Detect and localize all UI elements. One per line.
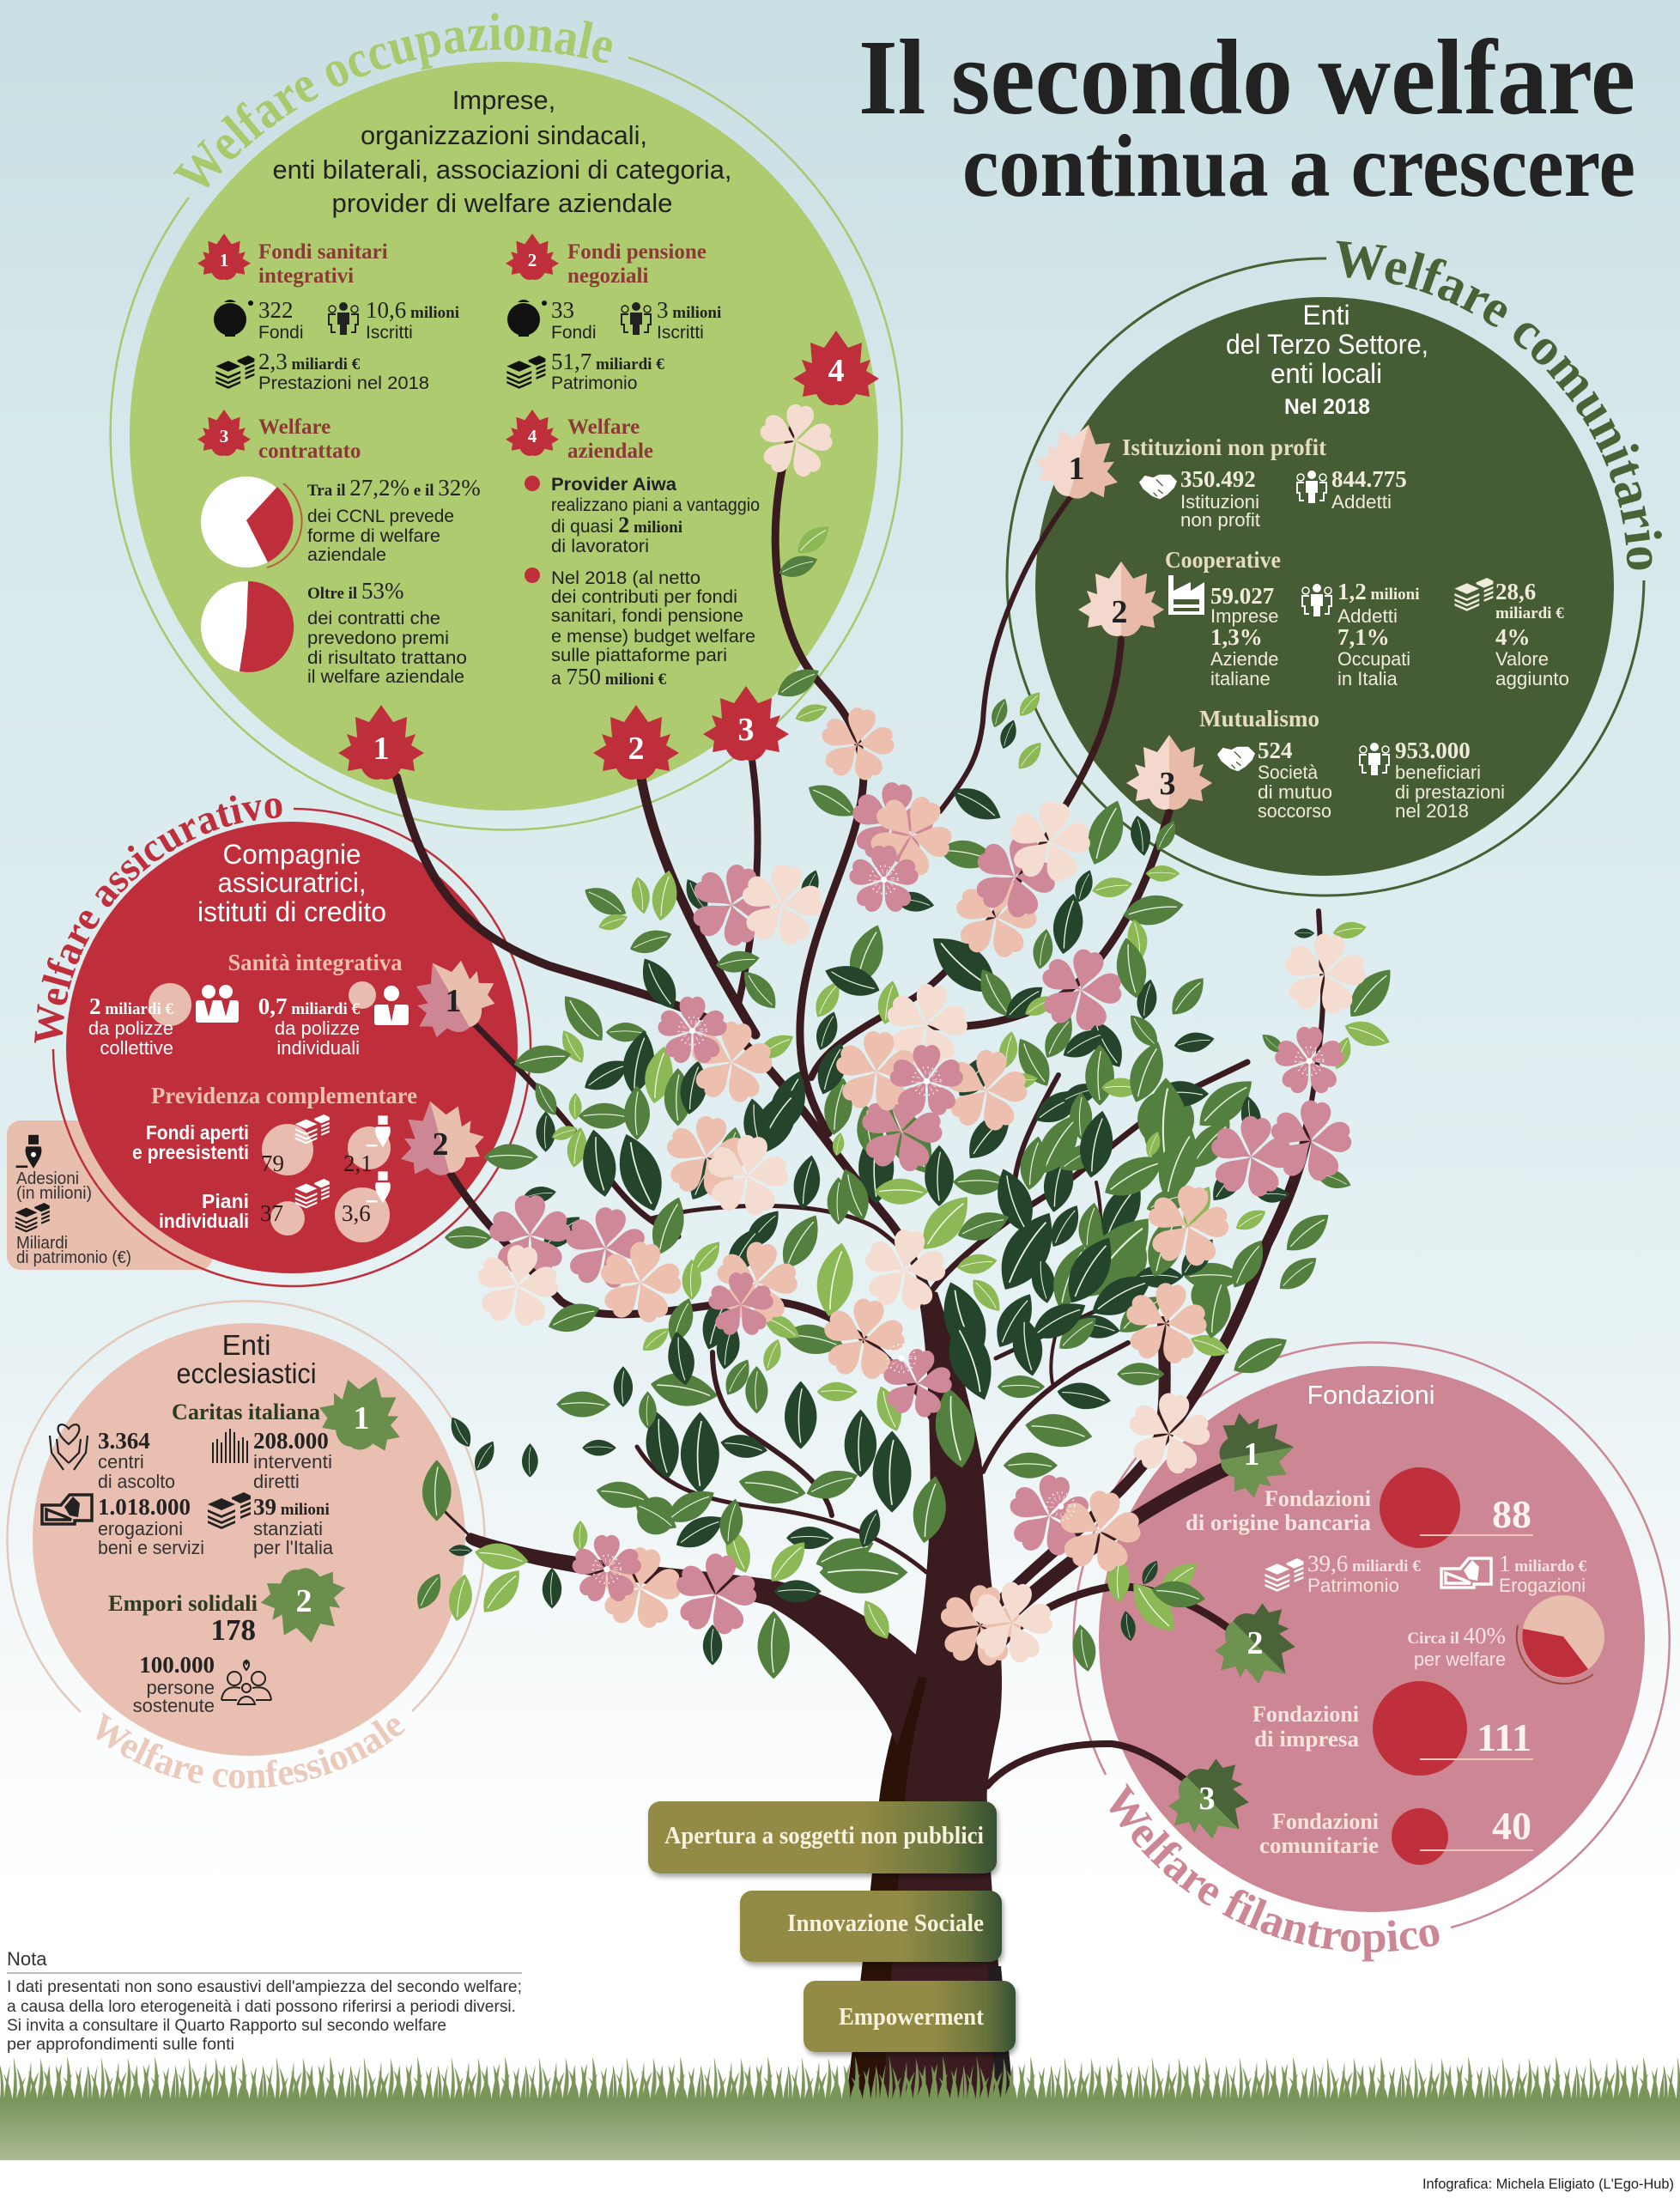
section: istituzioni non profit: Istituzioni: [1180, 491, 1259, 513]
left limb: [465, 1533, 923, 1747]
section: caritas italiana: di ascolto: [98, 1471, 175, 1492]
section: fondi pensione negoziali: Patrimonio: [551, 373, 637, 393]
nota text block: Nota: [7, 1948, 47, 1970]
item: fondazioni comunitarie 40: comunitarie: [1259, 1833, 1379, 1858]
section: cooperative: Aziende: [1210, 648, 1279, 670]
legend box: adesioni and patrimonio: (in milioni): [16, 1184, 92, 1203]
item: fondazioni di origine bancaria 88: 88: [1492, 1492, 1531, 1536]
section: caritas italiana: 1.018.000: [98, 1494, 191, 1520]
legend box: adesioni and patrimonio: Adesioni: [16, 1169, 79, 1188]
section: welfare contrattato with pies: contrattato: [258, 440, 361, 463]
section: welfare aziendale: e mense) budget welfare: [551, 627, 755, 647]
section: welfare aziendale: [506, 410, 760, 689]
intro text: enti locali: [1271, 358, 1382, 389]
section: istituzioni non profit: non profit: [1180, 509, 1260, 531]
nota text block: per approfondimenti sulle fonti: [7, 2036, 234, 2054]
branch to comunitario leaf 1: [940, 494, 1073, 811]
bubbles: values: [262, 1124, 391, 1242]
intro text: ecclesiastici: [177, 1357, 316, 1389]
section: welfare aziendale: sulle piattaforme pari: [551, 646, 727, 665]
section: welfare contrattato with pies: il welfare aziendale: [307, 667, 464, 687]
numbered leaves: assicurativo: 2: [433, 1126, 448, 1163]
section: welfare aziendale: realizzano piani a vantaggio: [551, 495, 760, 515]
section: mutualismo: di mutuo: [1258, 781, 1332, 803]
numbered leaves: filantropico: [1156, 1405, 1316, 1860]
section: fondi sanitari integrativi: 10,6 milioni: [366, 297, 459, 323]
label: apertura a soggetti non pubblici: [648, 1801, 997, 1873]
section: welfare aziendale: Nel 2018 (al netto: [551, 568, 701, 588]
numbered leaves: confessionale: 1: [354, 1400, 369, 1436]
arc heading: welfare comunitario: Welfare comunitario: [1336, 240, 1662, 570]
intro text: Enti: [222, 1329, 270, 1361]
section: welfare aziendale: aziendale: [567, 440, 653, 463]
section: fondi pensione negoziali: 51,7 miliardi €: [551, 349, 664, 374]
numbered leaves: confessionale: 2: [295, 1583, 312, 1619]
intro text: [177, 1329, 316, 1389]
intro text: assicuratrici,: [218, 867, 366, 898]
numbered leaves: occupazionale: 2: [628, 731, 644, 767]
section: welfare aziendale: a 750 milioni €: [551, 664, 667, 689]
credit: Infografica: Michela Eligiato (L'Ego-Hub): [1422, 2176, 1674, 2192]
section: caritas italiana: 39 milioni: [253, 1494, 330, 1520]
section: istituzioni non profit: 350.492: [1180, 466, 1256, 492]
icon: raised hands: [213, 1429, 247, 1463]
section: welfare contrattato with pies: forme di welfare: [307, 526, 440, 546]
panel: welfare assicurativo: [34, 795, 532, 1288]
numbered leaves: comunitario: 3: [1159, 766, 1176, 802]
section: cooperative: 7,1%: [1337, 624, 1390, 650]
item: fondazioni comunitarie 40: [1259, 1804, 1533, 1865]
title: Il secondo welfare: [858, 19, 1635, 137]
pie chart 40%: per welfare: [1414, 1648, 1506, 1670]
nota text block: a causa della loro eterogeneità i dati possono riferirsi a periodi diversi.: [7, 1998, 516, 2016]
section: welfare aziendale: di quasi 2 milioni: [551, 513, 682, 537]
arc heading: welfare assicurativo: Welfare assicurativo: [34, 795, 282, 1043]
arc heading: welfare occupazionale: Welfare occupazionale: [173, 13, 612, 187]
section: mutualismo: beneficiari: [1395, 762, 1481, 783]
numbered leaves: occupazionale: 3: [738, 712, 754, 748]
label: empowerment: [804, 1981, 1016, 2052]
section: welfare contrattato with pies: Oltre il 53%: [307, 578, 403, 604]
stats: patrimonio and erogazioni: 1 miliardo €: [1499, 1551, 1587, 1576]
section: empori solidali: persone: [146, 1677, 215, 1698]
section: cooperative: miliardi €: [1495, 604, 1564, 622]
section: fondi pensione negoziali: 3 milioni: [657, 297, 721, 323]
section: cooperative: italiane: [1210, 668, 1271, 689]
title: [858, 19, 1635, 216]
legend box: adesioni and patrimonio: [7, 1120, 213, 1270]
numbered leaves: filantropico: 3: [1198, 1781, 1216, 1817]
branch to occupazionale leaf 3: [738, 760, 758, 1005]
section: istituzioni non profit: 844.775: [1331, 466, 1407, 492]
stats: patrimonio and erogazioni: Erogazioni: [1499, 1575, 1586, 1596]
numbered leaves: occupazionale: [338, 331, 879, 780]
arc heading: welfare filantropico: Welfare filantropico: [1109, 1782, 1439, 1961]
section: sanità integrativa: Sanità integrativa: [228, 950, 403, 975]
section: cooperative: 4%: [1495, 624, 1530, 650]
section: cooperative: Occupati: [1337, 648, 1410, 670]
label: apertura a soggetti non pubblici: Apertura a soggetti non pubblici: [664, 1823, 984, 1849]
section: fondi pensione negoziali: Fondi pensione: [567, 240, 707, 264]
branch to occupazionale leaf 4: [775, 412, 864, 1133]
numbered leaves: comunitario: 1: [1068, 451, 1085, 487]
section: sanità integrativa: 0,7 miliardi €: [258, 993, 360, 1019]
item: fondazioni comunitarie 40: Fondazioni: [1272, 1809, 1379, 1834]
branch to assicurativo leaf 2: [448, 1169, 931, 1417]
section: cooperative: Imprese: [1210, 605, 1278, 627]
intro text: [1226, 300, 1428, 419]
panel: welfare confessionale: [6, 1300, 486, 1788]
intro text: [273, 85, 731, 218]
section: welfare contrattato with pies: dei contratti che: [307, 609, 440, 628]
section: sanità integrativa: da polizze: [275, 1017, 360, 1039]
section: cooperative: [1165, 547, 1569, 689]
arc heading: welfare confessionale: Welfare confessionale: [96, 1712, 405, 1788]
intro text: Nel 2018: [1284, 395, 1370, 419]
section: welfare contrattato with pies: 3: [220, 426, 228, 446]
section: previdenza complementare: 2,1: [343, 1151, 373, 1176]
section: mutualismo: Mutualismo: [1199, 706, 1319, 732]
heading: fondazioni: Fondazioni: [1307, 1380, 1435, 1410]
section: welfare contrattato with pies: aziendale: [307, 545, 386, 565]
section: caritas italiana: per l'Italia: [253, 1537, 334, 1558]
section: previdenza complementare: individuali: [159, 1210, 249, 1232]
numbered leaves: confessionale: [256, 1363, 416, 1650]
section: welfare aziendale: Provider Aiwa: [551, 475, 676, 495]
nota text block: [7, 1948, 522, 2054]
branch to assicurativo leaf 1: [468, 1017, 678, 1236]
section: mutualismo: 953.000: [1395, 738, 1471, 763]
section: empori solidali: 178: [211, 1613, 256, 1647]
intro text: del Terzo Settore,: [1226, 329, 1428, 360]
numbered leaves: filantropico: 1: [1243, 1436, 1260, 1472]
section: welfare contrattato with pies: prevedono premi: [307, 628, 449, 648]
section: previdenza complementare: 79: [261, 1151, 284, 1176]
numbered leaves: occupazionale: 4: [828, 353, 845, 389]
branch to occupazionale leaf 1: [397, 777, 936, 1314]
section: caritas italiana: 208.000: [253, 1428, 329, 1454]
panel: welfare occupazionale: [109, 13, 903, 831]
intro text: provider di welfare aziendale: [331, 188, 673, 218]
section: welfare contrattato with pies: Tra il 27,2% e il 32%: [307, 475, 481, 501]
section: welfare aziendale: sanitari, fondi pensione: [551, 606, 743, 626]
section: istituzioni non profit: Istituzioni non profit: [1122, 434, 1326, 460]
section: empori solidali: Empori solidali: [108, 1591, 258, 1616]
section: fondi sanitari integrativi: Prestazioni nel 2018: [258, 373, 429, 393]
section: previdenza complementare: Piani: [202, 1190, 249, 1212]
section: welfare contrattato with pies: dei CCNL prevede: [307, 507, 454, 526]
section: sanità integrativa: 2 miliardi €: [89, 993, 173, 1019]
title: continua a crescere: [962, 117, 1635, 216]
tree foliage leaves: [410, 519, 1401, 1679]
stats: patrimonio and erogazioni: Patrimonio: [1307, 1575, 1399, 1596]
section: sanità integrativa: collettive: [100, 1037, 173, 1059]
intro text: istituti di credito: [197, 896, 386, 927]
section: caritas italiana: centri: [98, 1451, 144, 1472]
section: caritas italiana: Caritas italiana: [172, 1400, 320, 1424]
section: fondi sanitari integrativi: Fondi: [258, 323, 304, 343]
section: previdenza complementare: Previdenza complementare: [151, 1083, 417, 1108]
item: fondazioni di impresa 111: Fondazioni: [1252, 1702, 1359, 1727]
icon: family: [221, 1661, 271, 1704]
icon: single person: [374, 986, 409, 1025]
intro text: Compagnie: [223, 839, 361, 870]
section: empori solidali: sostenute: [133, 1695, 215, 1716]
section: cooperative: 1,3%: [1210, 624, 1263, 650]
section: welfare aziendale: dei contributi per fondi: [551, 587, 737, 607]
section: previdenza complementare: 37: [260, 1200, 283, 1226]
section: sanità integrativa: individuali: [276, 1037, 360, 1059]
branch to occupazionale leaf 2: [640, 768, 755, 1035]
section: fondi sanitari integrativi: Iscritti: [366, 323, 413, 343]
section: welfare contrattato with pies: Welfare: [258, 416, 331, 439]
section: empori solidali: 100.000: [139, 1652, 215, 1678]
section: cooperative: 28,6: [1495, 579, 1536, 604]
section: fondi sanitari integrativi: 1: [220, 250, 228, 270]
item: fondazioni di impresa 111: [1252, 1681, 1533, 1776]
numbered leaves: comunitario: 2: [1111, 594, 1128, 630]
icon: hands with heart: [50, 1424, 88, 1470]
section: istituzioni non profit: Addetti: [1331, 491, 1392, 513]
section: cooperative: 59.027: [1210, 583, 1274, 609]
section: welfare contrattato with pies: di risultato trattano: [307, 648, 467, 668]
section: mutualismo: 524: [1258, 738, 1293, 763]
intro text: [197, 839, 386, 927]
pie chart 40%: [1407, 1595, 1604, 1684]
stats: patrimonio and erogazioni: [1265, 1551, 1587, 1596]
legend box: adesioni and patrimonio: Miliardi: [16, 1234, 68, 1253]
section: cooperative: 1,2 milioni: [1337, 579, 1420, 604]
section: welfare aziendale: Welfare: [567, 416, 640, 439]
label: innovazione sociale: Innovazione Sociale: [787, 1910, 984, 1937]
section: mutualismo: di prestazioni: [1395, 781, 1505, 803]
intro text: enti bilaterali, associazioni di categoria,: [273, 155, 731, 185]
section: fondi pensione negoziali: [506, 234, 721, 393]
section: previdenza complementare: Fondi aperti: [146, 1121, 249, 1144]
section: welfare aziendale: 4: [528, 426, 537, 446]
pie chart 40%: Circa il 40%: [1407, 1623, 1506, 1648]
label: empowerment: Empowerment: [839, 2004, 985, 2031]
section: mutualismo: nel 2018: [1395, 800, 1469, 822]
stats: patrimonio and erogazioni: 39,6 miliardi €: [1307, 1551, 1421, 1576]
tree blossoms: [468, 398, 1374, 1674]
intro text: organizzazioni sindacali,: [361, 120, 647, 150]
section: mutualismo: [1199, 706, 1505, 822]
numbered leaves: filantropico: 2: [1246, 1625, 1264, 1661]
pie chart 27-32%: [201, 477, 302, 568]
branch to comunitario leaf 3: [931, 811, 1169, 1027]
section: caritas italiana: diretti: [253, 1471, 300, 1492]
section: cooperative: Cooperative: [1165, 547, 1281, 573]
section: fondi sanitari integrativi: [197, 234, 459, 393]
section: fondi sanitari integrativi: integrativi: [258, 264, 354, 288]
section: caritas italiana: erogazioni: [98, 1518, 183, 1539]
tree: trunk and branches: [397, 412, 1323, 2100]
intro text: Enti: [1302, 300, 1350, 331]
section: welfare aziendale: di lavoratori: [551, 537, 649, 556]
nota text block: Si invita a consultare il Quarto Rapporto sul secondo welfare: [7, 2017, 446, 2035]
section: fondi sanitari integrativi: Fondi sanitari: [258, 240, 388, 264]
section: fondi sanitari integrativi: 2,3 miliardi €: [258, 349, 361, 374]
section: fondi sanitari integrativi: 322: [258, 297, 294, 323]
nota text block: I dati presentati non sono esaustivi dell'ampiezza del secondo welfare;: [7, 1978, 522, 1996]
item: fondazioni di impresa 111: 111: [1477, 1715, 1531, 1759]
section: cooperative: aggiunto: [1495, 668, 1569, 689]
section: fondi pensione negoziali: negoziali: [567, 264, 648, 288]
section: fondi pensione negoziali: 2: [528, 250, 537, 270]
section: cooperative: Addetti: [1337, 605, 1398, 627]
item: fondazioni di origine bancaria 88: [1186, 1467, 1533, 1548]
section: cooperative: Valore: [1495, 648, 1549, 670]
section: istituzioni non profit: [1122, 434, 1407, 531]
section: mutualismo: Società: [1258, 762, 1319, 783]
section: caritas italiana: beni e servizi: [98, 1537, 204, 1558]
item: fondazioni di impresa 111: di impresa: [1254, 1727, 1359, 1752]
label: innovazione sociale: [740, 1891, 1002, 1962]
section: fondi pensione negoziali: Iscritti: [657, 323, 704, 343]
section: cooperative: in Italia: [1337, 668, 1398, 689]
section: previdenza complementare: 3,6: [342, 1200, 371, 1226]
section: caritas italiana: interventi: [253, 1451, 332, 1472]
section: caritas italiana: 3.364: [98, 1428, 150, 1454]
section: welfare contrattato with pies: [197, 410, 481, 687]
pie chart 53%: [201, 581, 294, 672]
ground and grass: [0, 2056, 1680, 2160]
section: previdenza complementare: e preesistenti: [132, 1141, 249, 1163]
numbered leaves: comunitario: [1028, 414, 1212, 810]
item: fondazioni di origine bancaria 88: Fondazioni: [1265, 1486, 1371, 1511]
section: empori solidali: [108, 1591, 271, 1716]
section: sanità integrativa: [88, 950, 409, 1059]
legend box: adesioni and patrimonio: di patrimonio (€): [16, 1248, 131, 1267]
trunk: [846, 1288, 1013, 2100]
numbered leaves: occupazionale: 1: [373, 731, 390, 767]
section: fondi pensione negoziali: Fondi: [551, 323, 597, 343]
intro text: Imprese,: [452, 85, 555, 115]
icon: two people: [196, 985, 239, 1023]
numbered leaves: assicurativo: 1: [445, 983, 462, 1019]
panel: welfare comunitario: [1006, 240, 1662, 896]
panel: welfare filantropico: [1072, 1341, 1671, 1961]
section: mutualismo: soccorso: [1258, 800, 1331, 822]
section: sanità integrativa: da polizze: [88, 1017, 173, 1039]
numbered leaves: assicurativo: [389, 942, 507, 1185]
section: fondi pensione negoziali: 33: [551, 297, 574, 323]
item: fondazioni comunitarie 40: 40: [1492, 1804, 1531, 1848]
branch to comunitario leaf 2: [811, 640, 1121, 1078]
right limbs: [996, 1464, 1236, 1627]
section: caritas italiana: [42, 1400, 334, 1558]
section: caritas italiana: stanziati: [253, 1518, 323, 1539]
section: previdenza complementare: [132, 1083, 417, 1242]
item: fondazioni di origine bancaria 88: di origine bancaria: [1186, 1510, 1371, 1535]
